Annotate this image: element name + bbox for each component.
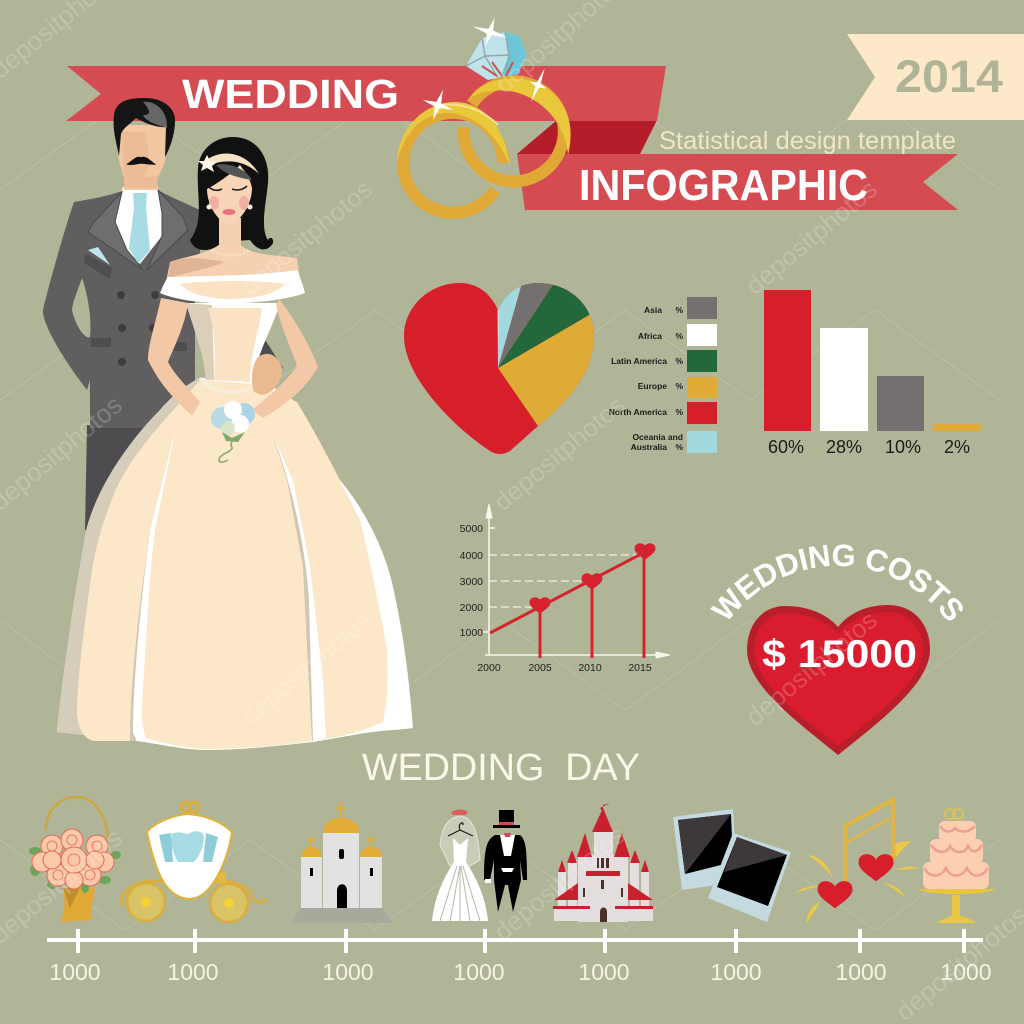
slice: Africa [498,308,499,366]
chart: heart pie [404,283,594,454]
groom tie [129,193,150,264]
year banner [847,34,1024,120]
jacket belts [91,338,187,351]
cost heart shape [747,605,930,755]
legend: % [675,356,683,366]
bride headband [205,153,259,174]
groom [43,98,283,530]
chart labels: 2010 [578,662,602,674]
chart labels: 2000 [477,662,501,674]
groom far sleeve [250,335,283,380]
bodice sash [200,378,253,392]
bride necklace [212,250,250,255]
chart labels: 1000 [460,627,483,639]
groom face [118,125,166,190]
chart dashed guides [489,555,638,607]
icon: church [290,802,393,923]
bride [57,137,413,750]
watermark: depositphotos [235,605,378,732]
legend: % [675,381,683,391]
bride bodice [186,303,280,384]
watermark: depositphotos [488,820,631,947]
pocket flap [84,253,112,279]
ribbon: WEDDING [66,66,666,154]
slice: Asia [498,283,553,368]
bar chart: 60% [768,437,804,457]
watermark: depositphotos [740,174,883,301]
chart labels: 5000 [460,523,483,535]
bar chart [764,290,981,457]
chart labels: 4000 [460,550,483,562]
legend: % [675,407,683,417]
watermark: depositphotos [740,605,883,732]
slice: North America [404,283,594,454]
groom moustache [128,157,154,164]
curved heading: WEDDING COSTS [710,544,963,620]
icon: flower basket [29,797,121,922]
groom shirt [115,187,162,264]
bride earrings [206,204,252,210]
line chart [460,504,670,674]
cost amount: $ 15000 [762,633,917,676]
timeline values [49,959,992,985]
skirt left fold [130,423,177,741]
chart line [490,552,645,658]
icon: music note with hearts [795,800,920,923]
legend: North America [609,407,667,417]
legend: Asia [644,305,662,315]
subtitle: Statistical design template [659,127,956,155]
icon: cake [917,809,996,923]
timeline axis [47,929,983,953]
icon: wedding rings [397,78,571,213]
skirt cream body [77,380,388,749]
year banner: 2014 [895,51,1003,102]
groom lapels [88,190,188,270]
slice: Latin America [498,284,590,368]
bride off-shoulder collar [160,270,305,303]
slice: Europe [498,315,594,426]
chart hearts [530,544,654,613]
legend: Australia [631,442,667,452]
icon: carriage [121,802,266,922]
legend: Africa [638,331,662,341]
bar chart: 10% [885,437,921,457]
heading: wedding day: WEDDING DAY [362,747,640,789]
chart labels: 2000 [460,602,483,614]
chart labels [460,523,652,674]
timeline values: 1000 [710,959,762,985]
timeline values: 1000 [49,959,101,985]
chart labels: 2015 [628,662,652,674]
wedding costs heart [710,544,963,755]
legend: % [675,442,683,452]
chart axes [483,504,670,658]
bride arms [148,298,200,416]
bar chart: 28% [826,437,862,457]
legend [609,297,717,453]
timeline values: 1000 [167,959,219,985]
bride eyes [209,186,247,190]
timeline values: 1000 [578,959,630,985]
pocket square [88,247,110,265]
groom trousers [85,425,185,530]
timeline values: 1000 [940,959,992,985]
bar chart: 2% [944,437,970,457]
legend: % [675,305,683,315]
chart labels: 2005 [528,662,552,674]
bride lips [222,209,236,215]
ribbon: INFOGRAPHIC [517,154,958,210]
timeline values: 1000 [453,959,505,985]
icon: photos [673,809,791,922]
icon: diamond [466,32,527,80]
bouquet [211,401,255,462]
skirt right fold [272,433,326,742]
bride neck and chest [166,218,300,282]
legend: % [675,331,683,341]
bride face [207,165,252,225]
timeline [47,929,992,985]
legend: Europe [638,381,667,391]
icon: castle [553,803,653,922]
arm gap [72,278,91,337]
icon: wedding dress [432,810,488,921]
bride fringe highlight [216,164,252,180]
timeline values: 1000 [835,959,887,985]
ribbon: WEDDING: WEDDING [182,71,399,117]
watermark: depositphotos [235,174,378,301]
groom hand [252,354,282,395]
ribbon: INFOGRAPHIC: INFOGRAPHIC [579,161,868,210]
groom jacket [43,190,204,428]
icon: tuxedo [484,810,527,912]
jacket buttons [117,291,159,366]
bride hair flower [198,155,217,172]
bride blush [209,196,249,210]
watermark: depositphotos [488,390,631,517]
groom hair [114,98,175,157]
skirt left shade [57,378,200,741]
legend: Oceania and [632,432,683,442]
legend: Latin America [611,356,667,366]
bride hair [190,137,273,250]
chart labels: 3000 [460,576,483,588]
slice: Oceania and Australia [498,286,522,368]
timeline values: 1000 [322,959,374,985]
icon: sparkles [418,12,553,125]
bride skirt [57,378,413,750]
